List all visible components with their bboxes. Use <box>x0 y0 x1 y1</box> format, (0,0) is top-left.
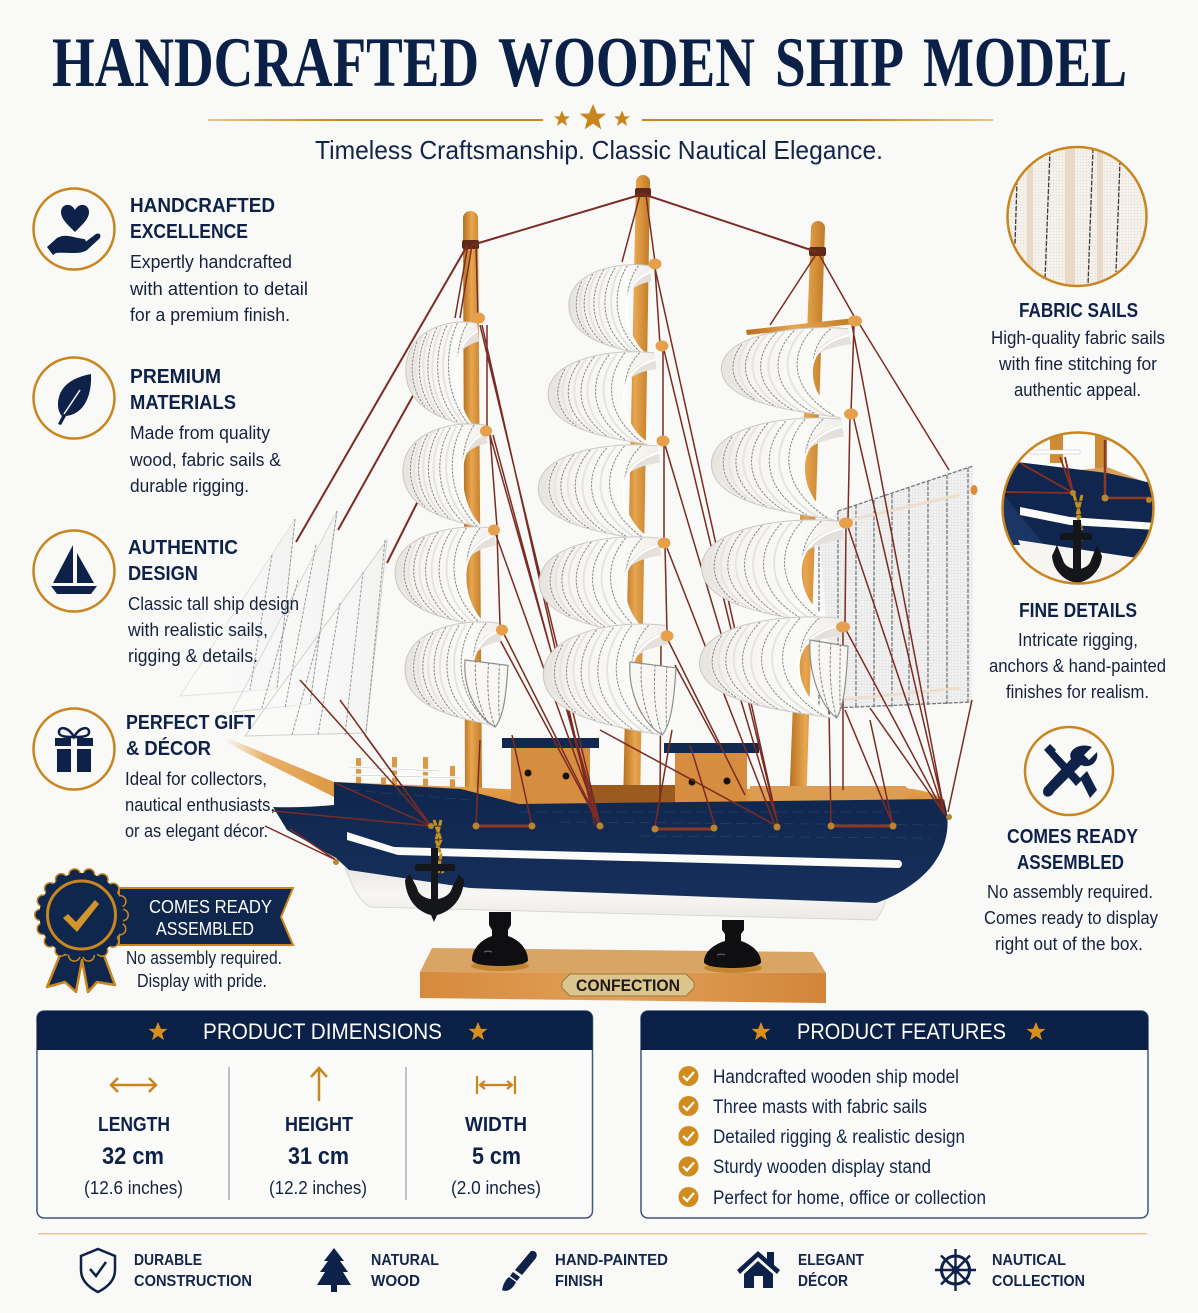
feature: comes ready assembled (right) <box>984 727 1158 954</box>
width column: WIDTH <box>465 1114 527 1136</box>
icon: shield <box>81 1249 115 1292</box>
footer badge: elegant decor <box>737 1251 864 1290</box>
footer badge: natural wood: NATURAL <box>371 1252 439 1269</box>
badge ribbon tails <box>47 950 115 992</box>
heading: HANDCRAFTED <box>130 195 275 217</box>
heading: FINE DETAILS <box>1019 600 1137 622</box>
jib sails <box>180 511 387 736</box>
heading: & DÉCOR <box>126 737 212 760</box>
description: or as elegant décor. <box>125 821 268 841</box>
description: durable rigging. <box>130 476 249 496</box>
panel header <box>37 1011 592 1050</box>
panel: product dimensions <box>37 1011 592 1218</box>
footer badge: nautical collection <box>935 1249 1085 1291</box>
ship model illustration <box>180 175 978 1003</box>
footer badge: durable construction: CONSTRUCTION <box>134 1273 252 1290</box>
description: anchors & hand-painted <box>989 656 1166 676</box>
footer badge: elegant decor: DÉCOR <box>798 1271 848 1290</box>
heading: AUTHENTIC <box>128 537 238 559</box>
footer badge: hand-painted finish: FINISH <box>555 1273 603 1290</box>
footer badge: natural wood: WOOD <box>371 1273 420 1290</box>
wood deck <box>335 782 945 815</box>
footer badge: nautical collection: COLLECTION <box>992 1273 1085 1290</box>
description: with fine stitching for <box>998 354 1157 374</box>
description: Expertly handcrafted <box>130 252 292 272</box>
heading <box>126 712 255 760</box>
icon: wrench and screwdriver <box>1025 727 1113 815</box>
badge caption <box>126 948 282 991</box>
yard end knobs <box>473 258 862 642</box>
feature: premium materials <box>34 358 281 496</box>
heading: MATERIALS <box>130 392 236 414</box>
icon: house <box>737 1251 780 1288</box>
description <box>129 423 281 496</box>
description: with attention to detail <box>129 279 308 299</box>
description: Made from quality <box>130 423 270 443</box>
height column: 31 cm <box>288 1143 349 1170</box>
rigging <box>265 194 972 860</box>
pedestals <box>472 912 761 968</box>
heading: DESIGN <box>128 563 198 585</box>
bow railing <box>349 757 461 788</box>
footer badge: durable construction <box>81 1249 252 1292</box>
heading <box>1007 826 1139 874</box>
panel header: PRODUCT FEATURES <box>797 1019 1006 1044</box>
feature list <box>713 1067 986 1209</box>
feature list: Three masts with fabric sails <box>713 1097 927 1118</box>
length column: 32 cm <box>102 1143 164 1170</box>
title: HANDCRAFTED <box>52 24 479 102</box>
icon: hand and heart <box>34 188 114 270</box>
feature: fabric sails <box>991 140 1165 400</box>
description: Intricate rigging, <box>1018 630 1138 650</box>
description: nautical enthusiasts, <box>125 795 275 815</box>
feature list: Detailed rigging & realistic design <box>713 1127 965 1148</box>
masts <box>463 175 855 808</box>
description: Ideal for collectors, <box>125 769 267 789</box>
title: MODEL <box>923 24 1127 102</box>
description: authentic appeal. <box>1014 380 1141 400</box>
description: wood, fabric sails & <box>129 450 281 470</box>
icon: pine tree <box>317 1248 351 1292</box>
badge caption: No assembly required. <box>126 948 282 968</box>
sails: mast three <box>699 328 851 718</box>
description: Comes ready to display <box>984 908 1158 928</box>
feature: authentic design <box>34 530 299 666</box>
circular photo: hull detail <box>1000 430 1156 590</box>
subtitle: Timeless Craftsmanship. Classic Nautical Elegance. <box>315 135 883 165</box>
description: Classic tall ship design <box>128 594 299 614</box>
footer badge: natural wood <box>317 1248 439 1292</box>
sails: mast one <box>395 322 508 727</box>
height column: HEIGHT <box>285 1114 353 1136</box>
hull fittings <box>333 814 952 865</box>
hull <box>273 782 948 920</box>
panel header <box>641 1011 1148 1050</box>
feature list: Sturdy wooden display stand <box>713 1157 931 1178</box>
feature: fine details <box>989 430 1166 702</box>
description: for a premium finish. <box>130 305 290 325</box>
width column: 5 cm <box>472 1143 521 1170</box>
heading: EXCELLENCE <box>130 221 248 243</box>
title <box>52 24 1127 102</box>
description: rigging & details. <box>128 646 258 666</box>
height column: (12.2 inches) <box>269 1178 367 1198</box>
ornament: rule with three stars <box>208 104 993 129</box>
icon: leaf <box>34 358 114 438</box>
anchor <box>405 848 464 922</box>
width column <box>451 1076 541 1198</box>
icon: gift box <box>34 708 114 790</box>
title: SHIP <box>775 24 904 102</box>
length column <box>84 1078 183 1198</box>
mast lashings <box>462 188 826 256</box>
footer badge: hand-painted finish: HAND-PAINTED <box>555 1252 668 1269</box>
bowsprit <box>225 737 336 798</box>
sails: mast two <box>538 265 676 735</box>
description: with realistic sails, <box>127 620 268 640</box>
badge rosette <box>40 873 124 957</box>
feature: perfect gift and decor <box>34 708 275 841</box>
heading: COMES READY <box>1007 826 1139 848</box>
icon: ship wheel <box>935 1249 976 1291</box>
heading <box>130 195 275 243</box>
badge: comes ready assembled <box>40 873 293 992</box>
height column <box>269 1068 367 1198</box>
description <box>989 630 1166 702</box>
wooden base <box>420 948 826 1003</box>
title: WOODEN <box>498 24 755 102</box>
brass name plate: CONFECTION <box>576 976 680 995</box>
heading: FABRIC SAILS <box>1019 300 1138 322</box>
footer badge: durable construction: DURABLE <box>134 1252 202 1269</box>
description <box>127 594 299 666</box>
description <box>991 328 1165 400</box>
width column: (2.0 inches) <box>451 1178 541 1198</box>
aft sail <box>819 466 978 708</box>
footer badge: hand-painted finish <box>502 1251 668 1291</box>
heading: ASSEMBLED <box>1017 852 1124 874</box>
description: High-quality fabric sails <box>991 328 1165 348</box>
check icons <box>678 1066 698 1207</box>
length column: (12.6 inches) <box>84 1178 183 1198</box>
chain <box>434 820 443 873</box>
feature: handcrafted excellence <box>34 188 308 325</box>
panel: product features <box>641 1011 1148 1218</box>
badge banner: ASSEMBLED <box>156 918 254 939</box>
description: No assembly required. <box>987 882 1153 902</box>
circular photo: sail fabric <box>1006 146 1148 288</box>
badge caption: Display with pride. <box>137 971 267 991</box>
feature list: Handcrafted wooden ship model <box>713 1067 959 1088</box>
heading <box>128 537 238 585</box>
icon: sailboat <box>34 530 114 612</box>
description <box>125 769 275 841</box>
panel header: PRODUCT DIMENSIONS <box>203 1019 442 1044</box>
badge banner <box>119 888 293 945</box>
description: right out of the box. <box>995 934 1143 954</box>
heading: PERFECT GIFT <box>126 712 255 734</box>
heading: PREMIUM <box>130 366 221 388</box>
icon: paint brush <box>502 1251 537 1291</box>
heading <box>130 366 236 414</box>
description: finishes for realism. <box>1006 682 1149 702</box>
description <box>129 252 308 325</box>
length column: LENGTH <box>98 1114 170 1136</box>
feature list: Perfect for home, office or collection <box>713 1188 986 1209</box>
footer badge: nautical collection: NAUTICAL <box>992 1252 1066 1269</box>
badge banner: COMES READY <box>149 896 272 917</box>
description <box>984 882 1158 954</box>
footer badge: elegant decor: ELEGANT <box>798 1252 864 1269</box>
cabins <box>502 738 759 806</box>
